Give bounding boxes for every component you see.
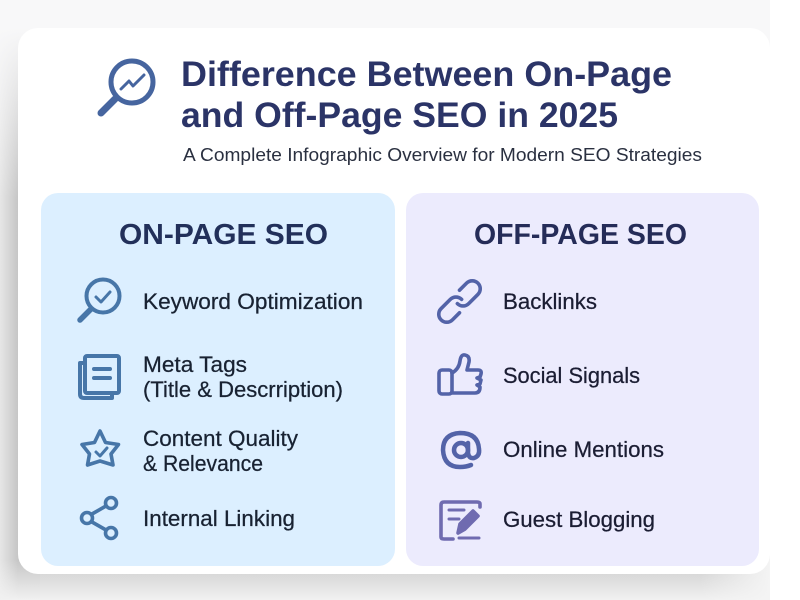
icon: chain link: [435, 277, 484, 326]
item: content quality: & Relevance: [143, 451, 263, 476]
icon: at sign: [443, 433, 479, 467]
item: meta tags: [143, 352, 343, 402]
item: social signals: Social Signals: [503, 363, 640, 388]
subtitle: A Complete Infographic Overview for Modern SEO Strategies: [183, 145, 702, 165]
panel heading: ON-PAGE SEO: [119, 219, 328, 251]
icon: share nodes: [82, 498, 116, 538]
panel: on-page SEO: [41, 193, 395, 566]
icon: thumbs up: [439, 355, 481, 394]
title: [181, 55, 672, 135]
icon: magnifier with check: [80, 280, 120, 320]
panel heading: OFF-PAGE SEO: [474, 219, 687, 251]
item: internal linking: Internal Linking: [143, 506, 295, 531]
title: Difference Between On-Page: [181, 55, 672, 94]
item: keyword optimization: Keyword Optimization: [143, 289, 363, 314]
panel: off-page SEO: [406, 193, 759, 566]
panel background: [406, 193, 759, 566]
icon: documents: [80, 356, 119, 398]
header icon: magnifier with trend line: [101, 61, 153, 113]
item: meta tags: (Title & Descrription): [143, 377, 343, 402]
item: guest blogging: Guest Blogging: [503, 507, 655, 532]
icon: note with pencil: [441, 502, 480, 539]
item: meta tags: Meta Tags: [143, 352, 247, 377]
panel background: [41, 193, 395, 566]
item: content quality: Content Quality: [143, 426, 298, 451]
item: online mentions: Online Mentions: [503, 437, 664, 462]
item: backlinks: Backlinks: [503, 289, 597, 314]
icon: star with check: [82, 431, 118, 465]
title: and Off-Page SEO in 2025: [181, 96, 618, 135]
item: content quality: [143, 426, 298, 476]
